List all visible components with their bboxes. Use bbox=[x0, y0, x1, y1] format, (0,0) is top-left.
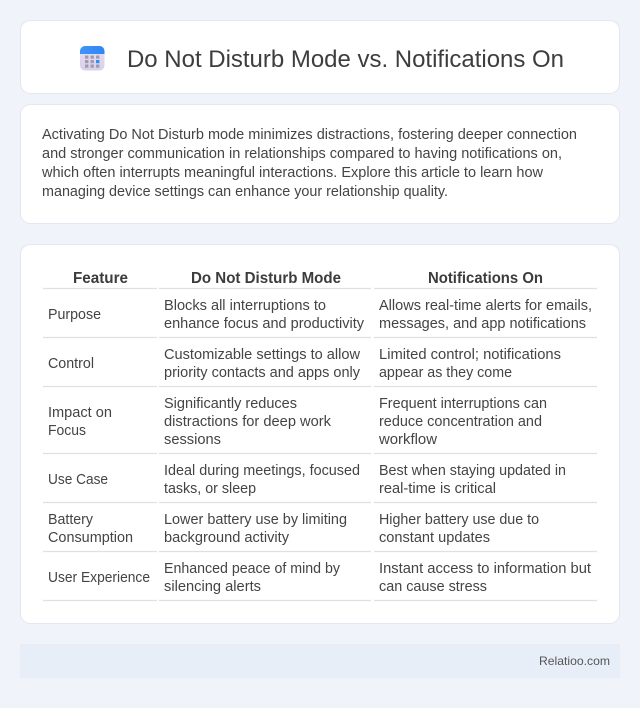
icon: calendar bbox=[80, 46, 104, 70]
footer: Relatioo.com bbox=[539, 654, 610, 668]
panel: comparison table bbox=[20, 244, 620, 624]
table row: Purpose: Blocks all interruptions to bbox=[164, 298, 326, 314]
text block: introduction paragraph: and stronger communication in relationships compared to having notifications on, bbox=[42, 146, 562, 162]
table row: Purpose bbox=[43, 298, 597, 338]
table row: User Experience: Enhanced peace of mind by bbox=[164, 561, 341, 577]
table header row: Do Not Disturb Mode bbox=[191, 270, 341, 287]
table row: Purpose: enhance focus and productivity bbox=[164, 316, 365, 332]
table row: Purpose: Purpose bbox=[48, 307, 101, 323]
table row: Impact on Focus: workflow bbox=[378, 432, 438, 448]
table row: Use Case: real-time is critical bbox=[379, 481, 496, 497]
footer bbox=[20, 644, 620, 678]
table row: Use Case bbox=[43, 463, 597, 502]
table row: User Experience: User Experience bbox=[48, 570, 150, 586]
table row: Battery Consumption: background activity bbox=[164, 530, 290, 546]
table row: Impact on Focus: sessions bbox=[164, 432, 221, 448]
panel: introduction bbox=[20, 104, 620, 224]
table row: Impact on Focus bbox=[43, 396, 597, 454]
table row: User Experience bbox=[43, 561, 597, 600]
table header row bbox=[43, 270, 597, 288]
table header row: Notifications On bbox=[428, 270, 543, 287]
table row: User Experience: Instant access to information but bbox=[379, 561, 591, 577]
table row: Impact on Focus: distractions for deep work bbox=[164, 414, 332, 430]
text block: introduction paragraph bbox=[41, 127, 577, 200]
table row: Use Case: Ideal during meetings, focused bbox=[164, 463, 360, 479]
table row: User Experience: silencing alerts bbox=[164, 579, 261, 595]
panel: title header bbox=[20, 20, 620, 94]
table row: Impact on Focus: Significantly reduces bbox=[164, 396, 297, 412]
table row: Battery Consumption: Lower battery use by limiting bbox=[164, 512, 347, 528]
table row: Battery Consumption: Higher battery use due to bbox=[379, 512, 539, 528]
table row: Control: appear as they come bbox=[379, 365, 512, 381]
table row: Control bbox=[43, 347, 597, 386]
text block: introduction paragraph: which often interrupts meaningful interactions. Explore this article to learn how bbox=[41, 165, 544, 181]
text block: introduction paragraph: managing device settings can enhance your relationship quality. bbox=[42, 184, 448, 200]
table row: Use Case: Use Case bbox=[48, 472, 108, 488]
table row: Impact on Focus: Frequent interruptions can bbox=[379, 396, 547, 412]
table row: Impact on Focus: reduce concentration and bbox=[379, 414, 542, 430]
table row: Battery Consumption: Battery bbox=[48, 512, 94, 528]
table row: Control: Limited control; notifications bbox=[379, 347, 561, 363]
table row: Control: Control bbox=[48, 356, 94, 372]
table row: Purpose: Allows real-time alerts for emails, bbox=[379, 298, 592, 314]
table row: Battery Consumption: Consumption bbox=[48, 530, 133, 546]
table row: Use Case: Best when staying updated in bbox=[379, 463, 566, 479]
table row: Battery Consumption bbox=[43, 512, 597, 552]
table row: Purpose: messages, and app notifications bbox=[379, 316, 586, 332]
table row: User Experience: can cause stress bbox=[379, 579, 487, 595]
table row: Control: priority contacts and apps only bbox=[164, 365, 361, 381]
table header row: Feature bbox=[73, 270, 128, 287]
table row: Control: Customizable settings to allow bbox=[164, 347, 361, 363]
table row: Impact on Focus: Focus bbox=[48, 423, 86, 439]
text block: introduction paragraph: Activating Do Not Disturb mode minimizes distractions, fostering deeper connection bbox=[42, 127, 577, 143]
table row: Use Case: tasks, or sleep bbox=[164, 481, 256, 497]
table row: Impact on Focus: Impact on bbox=[48, 405, 112, 421]
table row: Battery Consumption: constant updates bbox=[379, 530, 490, 546]
title: Do Not Disturb Mode vs. Notifications On bbox=[127, 46, 564, 73]
